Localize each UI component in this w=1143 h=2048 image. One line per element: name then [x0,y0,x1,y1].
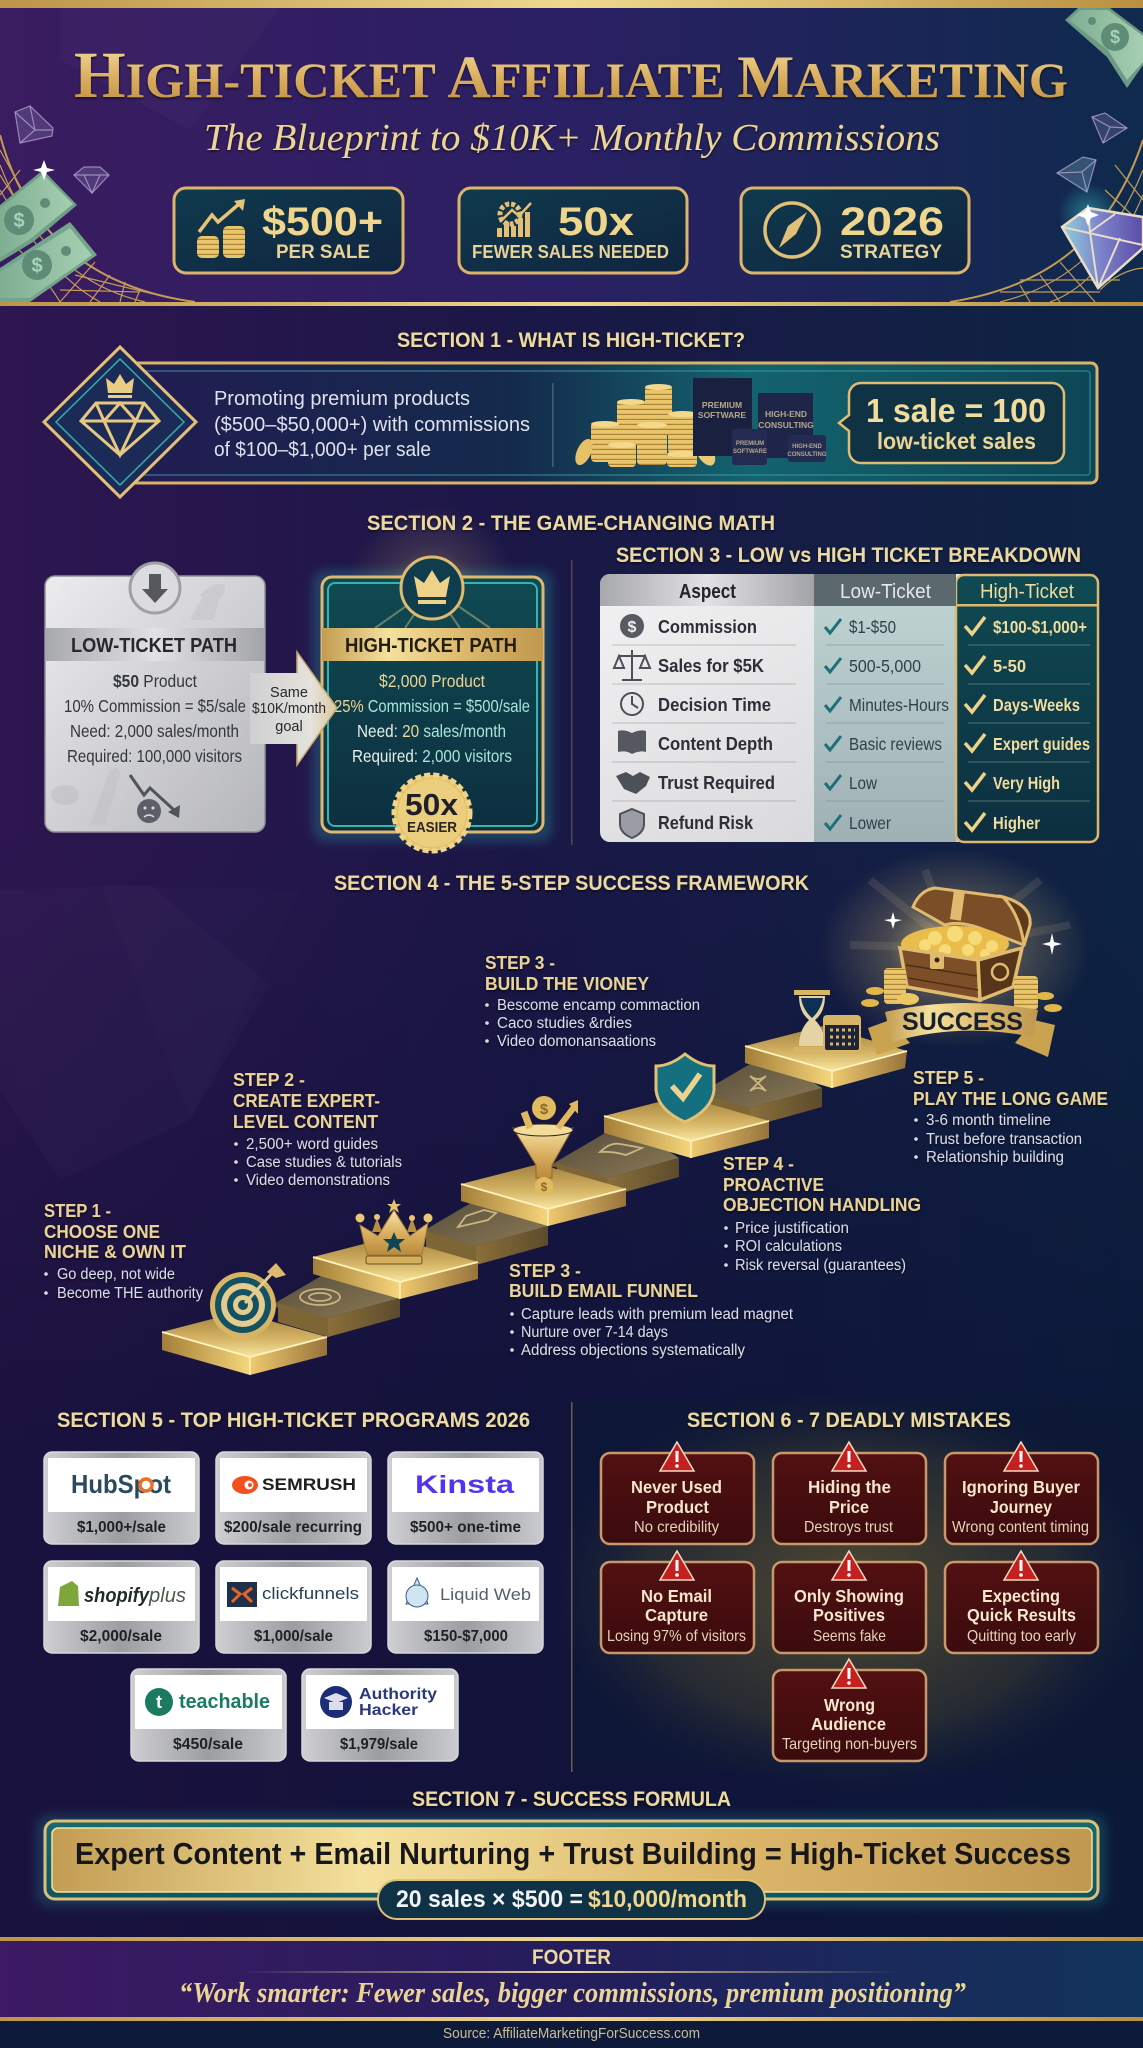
icon: premium product boxes: SOFTWARE [733,449,767,455]
panel: high-ticket path [312,505,553,851]
text: step 1 [44,1200,203,1302]
text: low-ticket math: Need: 2,000 sales/month [70,721,239,741]
panel: what is high-ticket [44,347,1097,497]
money bills left: $ [13,210,25,232]
row: commission: $ [628,619,637,636]
icon: shield [656,1054,714,1122]
large crystal diamond [1058,183,1143,288]
stair connector blocks [270,1054,822,1337]
card: ClickFunnels [216,1561,371,1653]
text: step 5: Relationship building [926,1149,1064,1166]
gold net left [0,135,195,302]
row: refund risk: Higher [993,813,1040,833]
card: Shopify Plus: shopify [84,1585,150,1607]
text: step 2: CREATE EXPERT- [233,1090,380,1111]
text: definition [214,388,530,461]
source line: Source: AffiliateMarketingForSuccess.com [443,2025,700,2042]
card: Teachable: t [156,1692,162,1712]
card: ClickFunnels: $1,000/sale [254,1628,333,1645]
panel: program cards [44,1452,543,1761]
text: low-ticket math: 10% Commission = $5/sale [64,696,246,716]
heading: section 4: SECTION 4 - THE 5-STEP SUCCESS FRAMEWORK [334,872,809,895]
row: refund risk: Lower [849,813,891,833]
card: Liquid Web [388,1561,543,1653]
card: Liquid Web: $150-$7,000 [424,1628,508,1645]
row: content depth: Content Depth [658,734,773,754]
heading: section 5: SECTION 5 - TOP HIGH-TICKET PROGRAMS 2026 [57,1409,530,1432]
icon: calendar [824,1016,860,1051]
text: high-ticket math: Required: 2,000 visitors [352,746,512,766]
icon: premium product boxes: HIGH-END [765,409,807,419]
text: step 4: PROACTIVE [723,1174,824,1195]
icon: gear and bars [497,203,531,237]
callout: 1 sale = 100: 1 sale = 100 [866,392,1046,429]
arrow: same goal: Same [270,685,308,701]
text: step 1: NICHE & OWN IT [44,1241,187,1262]
quote: “Work smarter: Fewer sales, bigger commissions, premium positioning” [179,1977,966,2009]
arrow: same goal [250,652,337,765]
text: step 4: Risk reversal (guarantees) [735,1257,906,1274]
row: commission: $1-$50 [849,617,896,637]
text: step 3 upper: BUILD THE VIONEY [485,973,650,994]
row: decision time: Days-Weeks [993,695,1080,715]
card: Authority Hacker: Authority [359,1686,437,1703]
text: high-ticket math: $2,000 Product [379,671,485,691]
text: step 3 upper [485,952,700,1050]
heading: section 2: SECTION 2 - THE GAME-CHANGING MATH [367,512,775,535]
text: step 4: ROI calculations [735,1238,842,1255]
icon: funnel with coins: $ [541,1180,548,1194]
icon: premium product boxes: PREMIUM [702,400,742,410]
pill: 20 sales calculation [378,1880,765,1919]
card: hiding the price [773,1442,926,1544]
card: hiding the price: Hiding the [808,1477,891,1497]
card: expecting quick results: Quick Results [967,1605,1076,1625]
card: Authority Hacker [302,1669,458,1761]
card: only showing positives: Seems fake [813,1628,886,1645]
text: step 1: CHOOSE ONE [44,1221,160,1242]
row: sales for 5K: Sales for $5K [658,656,764,676]
footer band: FOOTER [532,1946,611,1969]
card: no email capture: No Email [641,1586,712,1606]
card: never used product: Never Used [631,1477,722,1497]
card: Teachable [131,1669,286,1761]
text: step 2 [233,1069,402,1189]
heading: section 3: SECTION 3 - LOW vs HIGH TICKET BREAKDOWN [616,544,1081,567]
card: Kinsta: $500+ one-time [410,1519,521,1536]
card: ignoring buyer journey: Wrong content timing [952,1519,1089,1536]
text: step 3 lower: Nurture over 7-14 days [521,1324,668,1341]
table header row: High-Ticket [980,581,1074,603]
stat badge: $500+ per sale: $500+ [262,200,383,244]
text: step 2: LEVEL CONTENT [233,1111,379,1132]
card: wrong audience [773,1659,926,1761]
icon: crown circle [401,557,463,619]
icon: premium product boxes: HIGH-END [792,444,822,450]
text: step 3 lower: Address objections systematically [521,1342,745,1359]
text: step 2: Video demonstrations [246,1172,390,1189]
banner: success: SUCCESS [902,1008,1023,1036]
text: step 3 lower: STEP 3 - [509,1260,581,1281]
stat badge: 50x fewer sales: FEWER SALES NEEDED [472,241,669,262]
stat badge: $500+ per sale: PER SALE [276,242,370,263]
icon: compass [765,203,819,257]
card: Kinsta [388,1452,543,1544]
heading: section 1: SECTION 1 - WHAT IS HIGH-TICKET? [397,329,745,352]
icon: falling trend and sad face [130,775,180,823]
text: step 1: Become THE authority [57,1285,203,1302]
card: ignoring buyer journey: Ignoring Buyer [962,1477,1080,1497]
header banner [0,0,1143,306]
arrow: same goal: $10K/month [252,701,326,717]
card: Kinsta: Kinsta [415,1471,515,1499]
card: hiding the price: Destroys trust [804,1519,894,1536]
row: commission: $100-$1,000+ [993,617,1087,637]
callout: 1 sale = 100: low-ticket sales [877,428,1036,454]
icon: premium product boxes: PREMIUM [736,441,764,447]
text: step 3 upper: Caco studies &rdies [497,1015,632,1032]
card: expecting quick results [945,1551,1098,1653]
text: step 4: STEP 4 - [723,1153,794,1174]
callout: 1 sale = 100 [839,383,1064,463]
card: Authority Hacker: $1,979/sale [340,1736,418,1753]
card: ignoring buyer journey: Journey [990,1497,1052,1517]
text: step 5: STEP 5 - [913,1067,984,1088]
table header row: Aspect [679,581,736,603]
footer band [0,1937,1143,2021]
row: content depth: Basic reviews [849,734,942,754]
card: Shopify Plus: $2,000/sale [80,1628,162,1645]
icon: funnel with coins [513,1096,578,1195]
table: low vs high comparison [600,574,1098,842]
stat badge: 2026 strategy: 2026 [840,200,944,244]
text: step 3 lower [509,1260,794,1359]
subtitle: The Blueprint to $10K+ Monthly Commissions [204,117,940,159]
text: step 4: Price justification [735,1220,849,1237]
row: content depth: Expert guides [993,734,1090,754]
icon: coin stacks [572,384,719,469]
stat badge: 2026 strategy [741,188,969,273]
icon: premium product boxes: CONSULTING [787,452,827,458]
card: HubSpot: $1,000+/sale [77,1519,166,1536]
text: step 2: STEP 2 - [233,1069,305,1090]
panel: low-ticket path: LOW-TICKET PATH [71,635,237,657]
money bill top right [1065,8,1143,88]
row: trust required [616,772,1060,794]
text: step 1: STEP 1 - [44,1200,111,1221]
seal: 50x easier: 50x [405,787,459,822]
row: trust required: Trust Required [658,773,775,793]
banner: success [868,1003,1055,1057]
money bills left [0,160,97,302]
card: wrong audience: Targeting non-buyers [782,1736,917,1753]
panel: mistake cards [601,1442,1098,1761]
text: step 1: Go deep, not wide [57,1266,175,1283]
text: definition: of $100–$1,000+ per sale [214,439,431,461]
card: Liquid Web: Liquid Web [440,1585,531,1604]
heading: section 7: SECTION 7 - SUCCESS FORMULA [412,1788,731,1811]
card: no email capture: Capture [645,1605,708,1625]
seal: 50x easier: EASIER [407,819,457,836]
card: HubSpot: HubSpot [71,1469,171,1499]
row: sales for 5K [614,650,1026,680]
row: decision time: Minutes-Hours [849,695,949,715]
table header row: Low-Ticket [840,581,931,603]
card: only showing positives: Only Showing [794,1586,904,1606]
row: decision time: Decision Time [658,695,771,715]
panel: low-ticket path [45,563,265,832]
card: Semrush [216,1452,371,1544]
card: Shopify Plus [44,1561,199,1653]
arrow: same goal: goal [275,719,303,735]
small engravings on connectors [300,1076,766,1305]
icon: premium product boxes: CONSULTING [758,420,814,430]
seal: 50x easier [394,775,470,851]
row: commission: Commission [658,617,757,637]
text: definition: ($500–$50,000+) with commissions [214,414,530,436]
pill: 20 sales calculation: $10,000/month [588,1886,747,1913]
card: wrong audience: Audience [811,1714,886,1734]
stat badge: 50x fewer sales: 50x [558,200,634,244]
text: step 5: 3-6 month timeline [926,1112,1051,1129]
stat badge: $500+ per sale [174,188,403,273]
text: high-ticket math: Need: 20 sales/month [357,721,506,741]
card: never used product: Product [646,1497,709,1517]
text: step 4 [723,1153,921,1274]
text: step 5 [913,1067,1108,1166]
panel: mistakes background glow [550,1390,1143,1790]
icon: target [210,1263,286,1338]
card: Shopify Plus: plus [148,1585,186,1607]
text: step 3 upper: Bescome encamp commaction [497,997,700,1014]
row: refund risk [620,809,1040,838]
text: step 3 upper: STEP 3 - [485,952,555,973]
icon: hourglass [794,990,830,1052]
card: expecting quick results: Expecting [982,1586,1060,1606]
text: step 3 upper: Video domonansaations [497,1033,656,1050]
text: step 2: Case studies & tutorials [246,1154,402,1171]
card: ignoring buyer journey [945,1442,1098,1544]
icon: diamond badge [44,347,196,497]
heading: section 6: SECTION 6 - 7 DEADLY MISTAKES [687,1409,1011,1432]
text: step 2: 2,500+ word guides [246,1136,378,1153]
icon: premium product boxes: SOFTWARE [698,410,746,420]
icon: crown [356,1199,432,1264]
icon: premium product boxes [693,378,827,465]
money bill top right: $ [1110,27,1120,47]
card: expecting quick results: Quitting too early [967,1628,1076,1645]
table header row [679,581,1074,603]
gold net right [950,140,1143,302]
card: wrong audience: Wrong [824,1695,875,1715]
text: step 3 lower: Capture leads with premium lead magnet [521,1306,794,1323]
text: step 5: PLAY THE LONG GAME [913,1088,1108,1109]
text: step 4: OBJECTION HANDLING [723,1194,921,1215]
icon: funnel with coins: $ [540,1101,549,1118]
card: hiding the price: Price [829,1497,869,1517]
row: commission [620,614,1087,638]
card: Authority Hacker: Hacker [359,1702,418,1719]
panel: success formula: Expert Content + Email Nurturing + Trust Building = High-Ticket Success [75,1836,1071,1871]
card: no email capture [601,1551,754,1653]
row: trust required: Very High [993,773,1060,793]
row: sales for 5K: 500-5,000 [849,656,921,676]
text: step 3 lower: BUILD EMAIL FUNNEL [509,1280,698,1301]
card: never used product [601,1442,754,1544]
card: Teachable: teachable [179,1691,270,1713]
row: decision time [621,693,1080,715]
text: high-ticket math [334,671,530,766]
stat badge: 2026 strategy: STRATEGY [840,242,942,263]
card: HubSpot [44,1452,199,1544]
text: high-ticket math: 25% Commission = $500/sale [334,696,530,716]
title: HIGH-TICKET AFFILIATE MARKETING [74,39,1068,112]
card: no email capture: Losing 97% of visitors [607,1628,746,1645]
card: Semrush: SEMRUSH [262,1475,356,1494]
text: step 5: Trust before transaction [926,1131,1082,1148]
staircase [162,848,1090,1375]
text: definition: Promoting premium products [214,388,470,410]
card: only showing positives: Positives [813,1605,885,1625]
faint diamonds [15,106,1127,193]
text: low-ticket math [64,671,246,766]
pill: 20 sales calculation: 20 sales × $500 = [396,1886,583,1913]
card: Semrush: $200/sale recurring [224,1519,362,1536]
panel: success formula [36,1814,1107,1919]
card: never used product: No credibility [634,1519,719,1536]
card: Teachable: $450/sale [173,1736,243,1753]
row: trust required: Low [849,773,877,793]
stat badge: 50x fewer sales [459,188,687,273]
text: low-ticket math: $50 Product [113,671,197,691]
gold step blocks [162,1026,907,1375]
icon: coins and growth arrow [197,199,245,258]
icon: treasure chest [861,888,1062,1012]
card: ClickFunnels: clickfunnels [262,1584,359,1603]
row: content depth [618,730,1090,754]
card: only showing positives [773,1551,926,1653]
row: refund risk: Refund Risk [658,813,754,833]
row: sales for 5K: 5-50 [993,656,1026,676]
money bills left: $ [31,255,43,277]
panel: high-ticket path: HIGH-TICKET PATH [345,635,517,657]
text: low-ticket math: Required: 100,000 visitors [67,746,242,766]
icon: down arrow circle [130,563,180,613]
